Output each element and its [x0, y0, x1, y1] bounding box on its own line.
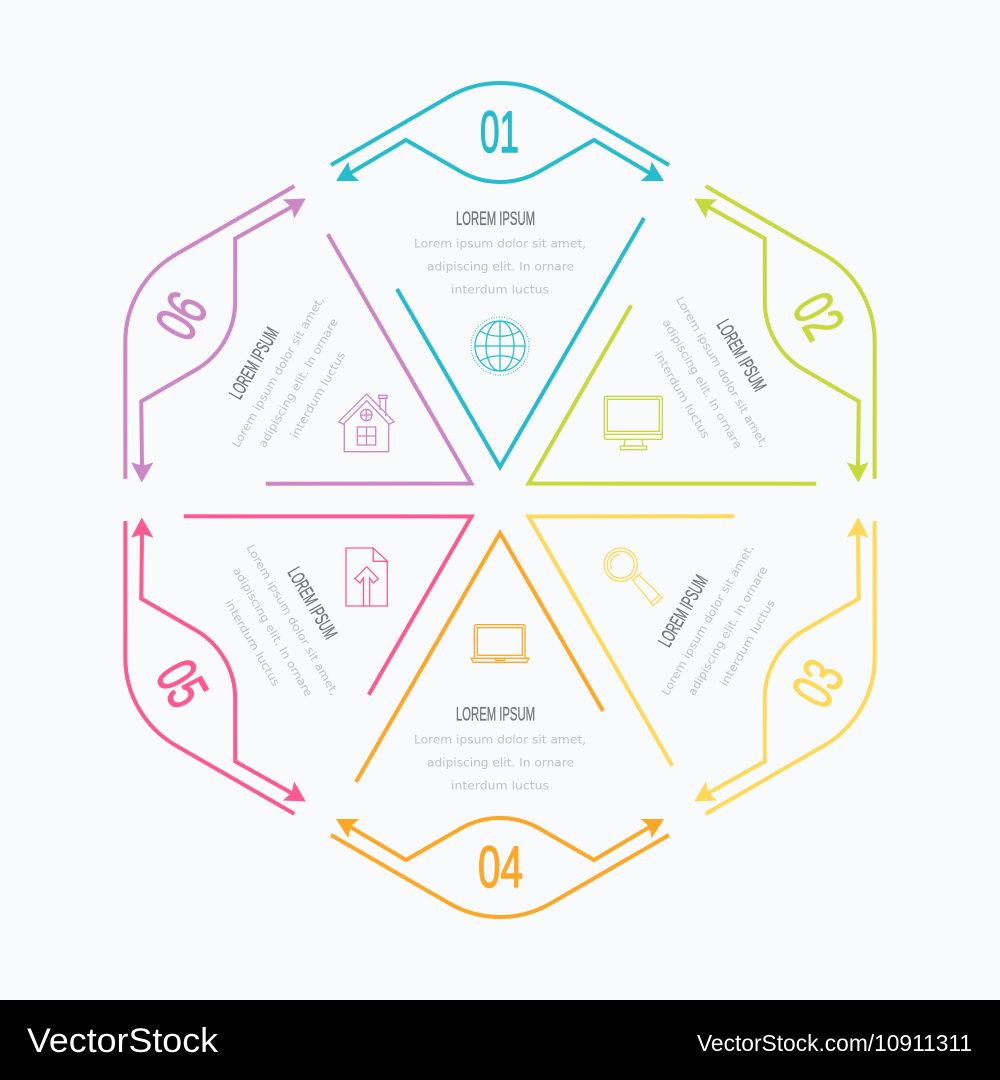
text block 06 — [204, 280, 367, 473]
arrow frame 04 — [331, 818, 669, 917]
text block 04: Lorem ipsum dolor sit amet, — [414, 734, 586, 746]
footer bar — [0, 1000, 1000, 1080]
number 04: 04 — [478, 835, 523, 900]
text block 04: interdum luctus — [451, 780, 549, 792]
text block 02: LOREM IPSUM — [712, 316, 770, 395]
triangle 04 — [356, 533, 603, 782]
text block 01: interdum luctus — [451, 284, 549, 296]
text block 02: Lorem ipsum dolor sit amet, — [673, 294, 770, 450]
text block 04: LOREM IPSUM — [456, 704, 535, 726]
text block 04: adipiscing elit. In ornare — [427, 756, 574, 770]
arrow frame 03 — [691, 513, 946, 855]
text block 06: LOREM IPSUM — [225, 324, 284, 403]
icon: monitor — [604, 396, 662, 450]
triangle 03 — [457, 427, 796, 766]
text block 06: adipiscing elit. In ornare — [256, 316, 341, 450]
arrow frame 05 — [54, 513, 309, 855]
text block 02 — [633, 280, 796, 473]
panel: step 05 — [54, 392, 523, 855]
panel: step 04 — [331, 533, 669, 917]
arrow frame 06 — [54, 145, 309, 487]
text block 03: interdum luctus — [718, 597, 778, 689]
number 02: 02 — [780, 282, 857, 350]
icon: house — [339, 394, 394, 452]
text block 02: interdum luctus — [652, 349, 712, 441]
panel: step 02 — [477, 145, 946, 608]
triangle 05 — [184, 392, 523, 730]
arrow frame 01 — [331, 83, 669, 182]
text block 05: LOREM IPSUM — [283, 564, 341, 643]
panel: step 03 — [457, 427, 946, 855]
text block 04 — [414, 704, 586, 792]
footer url: VectorStock.com/10911311 — [697, 1030, 972, 1056]
panel: step 01 — [331, 83, 669, 467]
footer logo: VectorStock — [27, 1022, 219, 1060]
number 05: 05 — [143, 649, 220, 718]
text block 01 — [414, 208, 586, 296]
triangle 02 — [477, 270, 816, 608]
icon: file upload — [346, 548, 387, 606]
triangle 01 — [397, 218, 644, 467]
triangle 06 — [204, 234, 543, 573]
icon: magnifier — [604, 548, 662, 606]
panel: step 06 — [54, 145, 543, 573]
number 01: 01 — [480, 100, 519, 165]
text block 02: adipiscing elit. In ornare — [660, 317, 744, 451]
text block 06: interdum luctus — [288, 349, 348, 441]
number 03: 03 — [780, 649, 857, 718]
text block 05 — [204, 527, 367, 721]
text block 06: Lorem ipsum dolor sit amet, — [230, 294, 327, 450]
text block 05: Lorem ipsum dolor sit amet, — [244, 542, 341, 698]
arrow frame 02 — [691, 145, 946, 487]
icon: globe — [471, 317, 529, 375]
text block 03: adipiscing elit. In ornare — [686, 564, 770, 698]
text block 05: interdum luctus — [222, 597, 283, 689]
text block 03: Lorem ipsum dolor sit amet, — [659, 542, 756, 698]
text block 03 — [633, 527, 796, 721]
text block 01: LOREM IPSUM — [456, 208, 535, 230]
icon: laptop — [471, 625, 529, 662]
text block 01: Lorem ipsum dolor sit amet, — [414, 238, 586, 250]
text block 05: adipiscing elit. In ornare — [230, 565, 315, 699]
text block 03: LOREM IPSUM — [654, 571, 713, 651]
text block 01: adipiscing elit. In ornare — [427, 260, 574, 274]
number 06: 06 — [143, 282, 220, 351]
